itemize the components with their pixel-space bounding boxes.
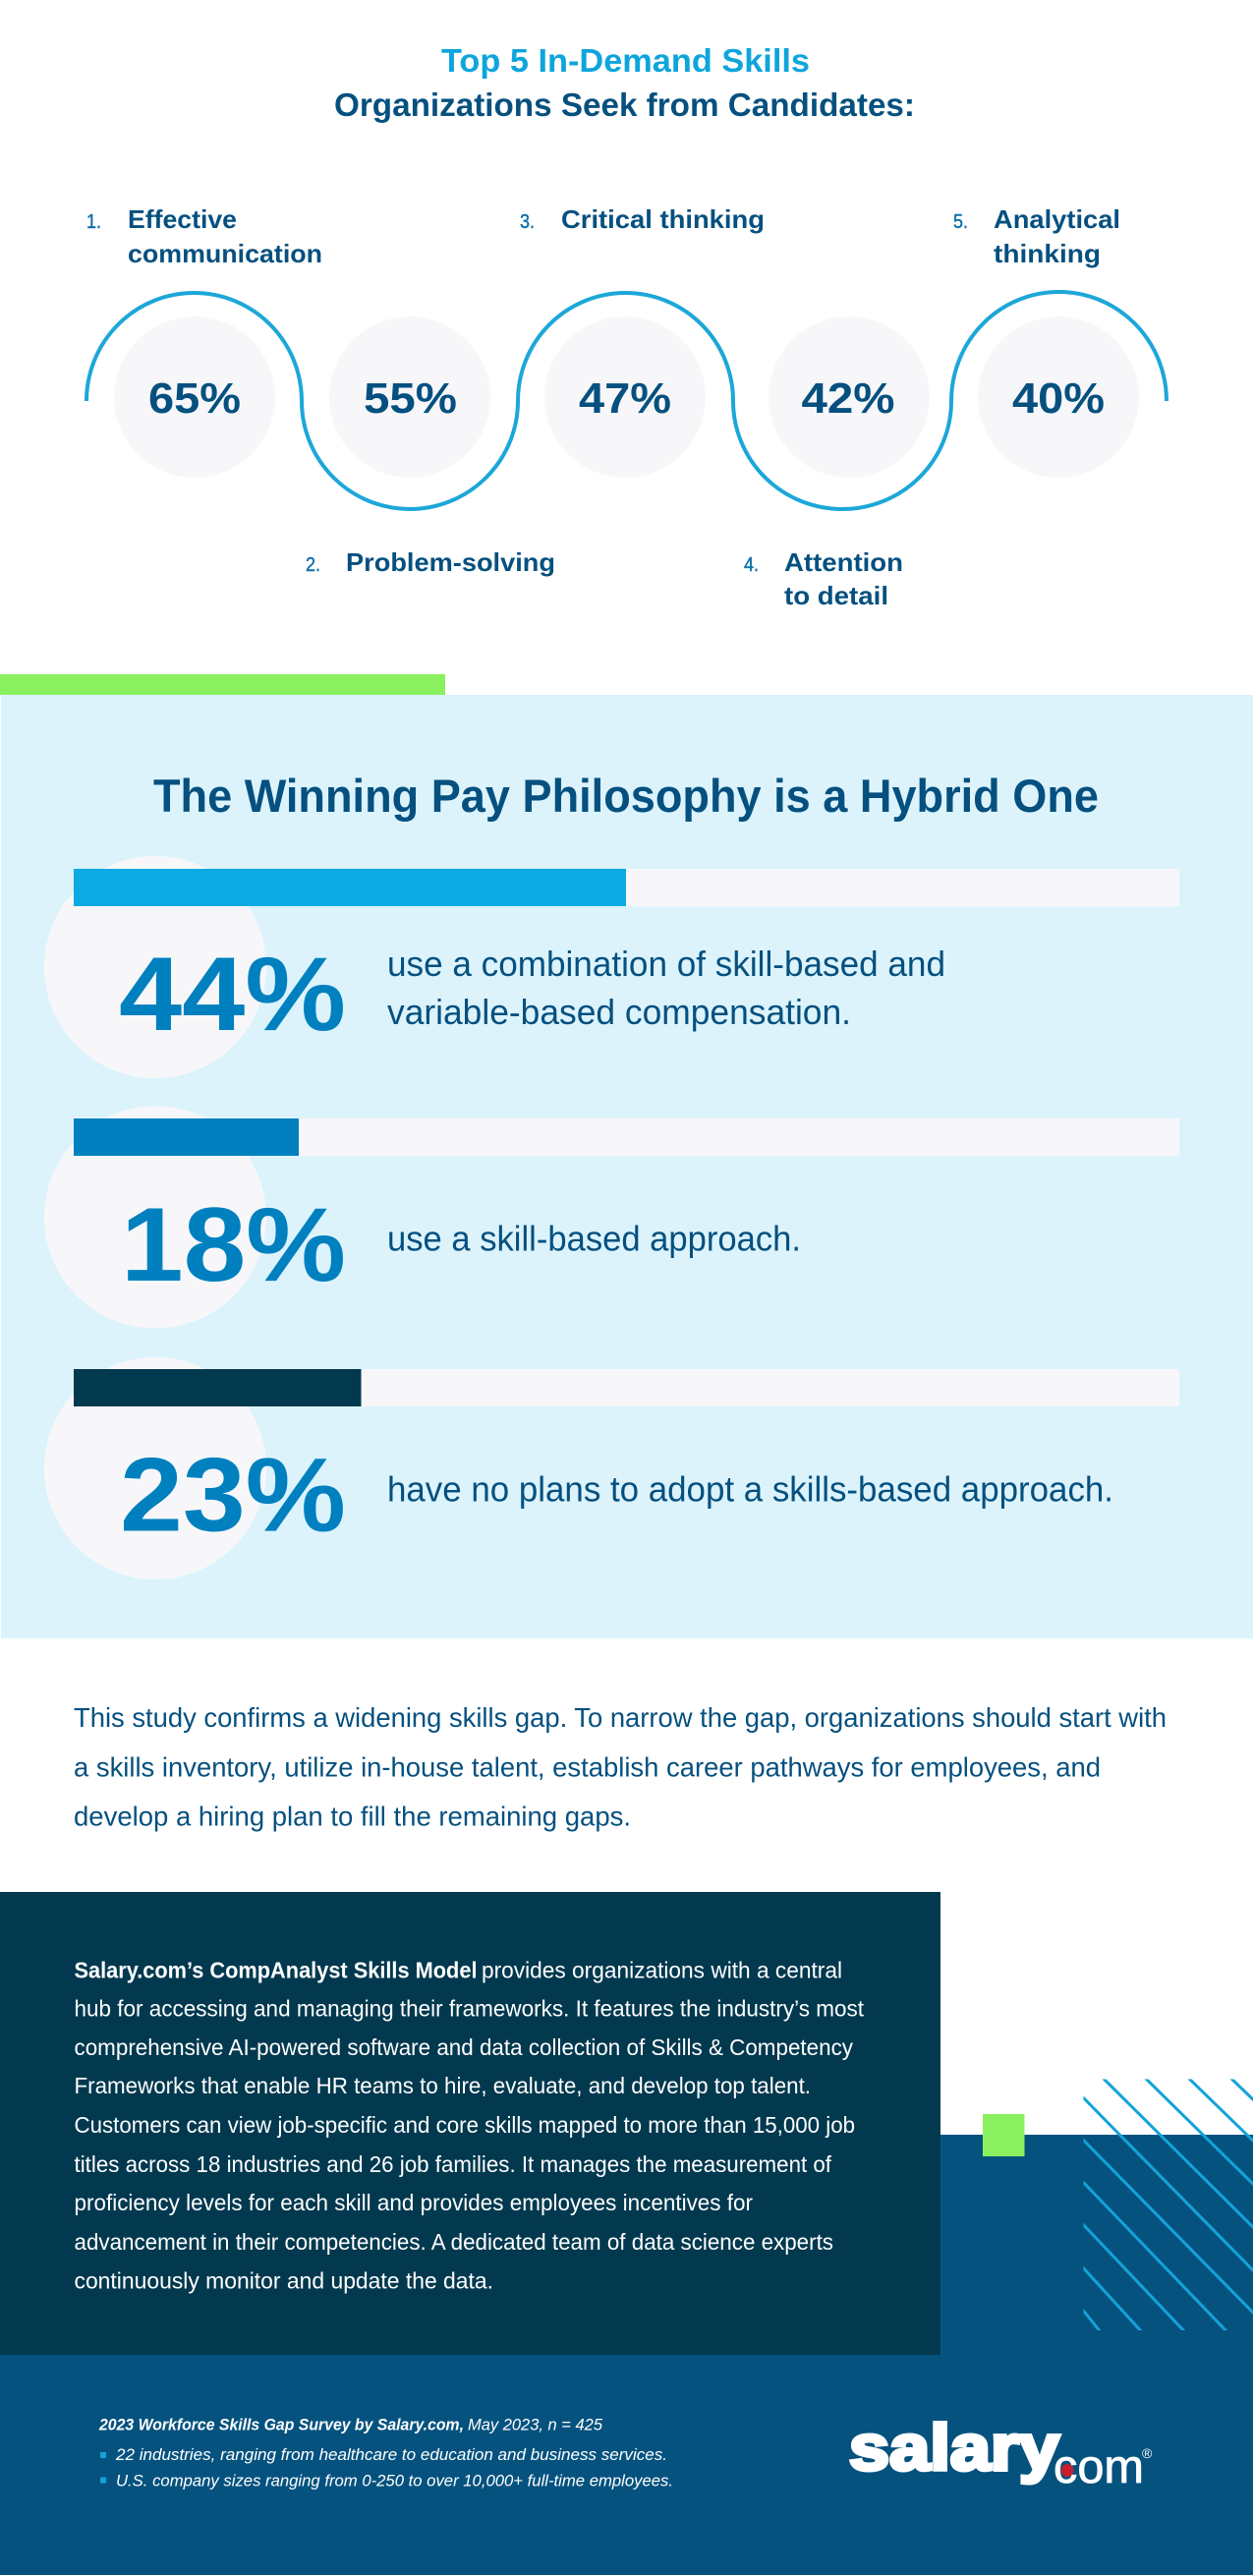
label: attention to detail: to detail xyxy=(784,581,888,610)
text block: survey source xyxy=(98,2416,673,2490)
text block: survey source: 22 industries, ranging from healthcare to education and business services. xyxy=(115,2445,667,2464)
label: critical thinking: 3. xyxy=(520,211,535,233)
row: 18 percent xyxy=(44,1107,1179,1329)
logo: salary.com: com xyxy=(1054,2441,1144,2493)
label: attention to detail: Attention xyxy=(784,547,903,577)
label: effective communication xyxy=(86,204,322,268)
panel: product description: Frameworks that enable HR teams to hire, evaluate, and develop top talent. xyxy=(75,2073,811,2098)
label: analytical thinking xyxy=(953,204,1120,268)
panel: product description xyxy=(0,1892,940,2355)
title xyxy=(334,42,915,123)
row: 23 percent: have no plans to adopt a skills-based approach. xyxy=(387,1468,1113,1510)
label: analytical thinking: Analytical xyxy=(994,204,1120,234)
label: effective communication: communication xyxy=(128,239,322,268)
label: effective communication: 1. xyxy=(86,211,101,233)
panel background xyxy=(1,695,1253,1638)
label: problem-solving: Problem-solving xyxy=(346,547,555,577)
percentage values: 65% xyxy=(148,374,241,423)
wave line xyxy=(86,292,1167,509)
title: Top 5 In-Demand Skills xyxy=(441,42,810,79)
title: Organizations Seek from Candidates: xyxy=(334,86,915,123)
label: problem-solving: 2. xyxy=(306,554,320,576)
label: analytical thinking: thinking xyxy=(994,239,1101,268)
text block: conclusion: develop a hiring plan to fill the remaining gaps. xyxy=(74,1801,631,1832)
text block: survey source: 2023 Workforce Skills Gap Survey by Salary.com, xyxy=(98,2416,464,2433)
text block: survey source: May 2023, n = 425 xyxy=(468,2416,603,2433)
panel: product description: titles across 18 industries and 26 job families. It manages the measurement of xyxy=(75,2151,832,2177)
row: 44 percent: use a combination of skill-based and xyxy=(387,944,945,984)
panel: product description: advancement in their competencies. A dedicated team of data science experts xyxy=(75,2229,833,2255)
percentage values: 47% xyxy=(579,374,671,423)
label: analytical thinking: 5. xyxy=(953,211,968,233)
panel: product description: comprehensive AI-powered software and data collection of Skills & Competency xyxy=(75,2034,853,2060)
row: 23 percent: 23% xyxy=(120,1435,346,1553)
panel: pay philosophy xyxy=(1,695,1253,1638)
percentage values xyxy=(148,374,1105,423)
percentage values: 42% xyxy=(802,374,894,423)
row: 44 percent: variable-based compensation. xyxy=(387,992,851,1032)
heading: The Winning Pay Philosophy is a Hybrid One xyxy=(153,770,1099,822)
percentage values: 55% xyxy=(364,374,457,423)
panel: product description: proficiency levels for each skill and provides employees incentives for xyxy=(75,2190,753,2215)
row: 44 percent: 44% xyxy=(119,935,346,1053)
diagonal stripes xyxy=(1081,2077,1253,2333)
label: effective communication: Effective xyxy=(128,204,237,234)
accent bar xyxy=(0,674,445,695)
panel: top 5 skills xyxy=(86,204,1167,610)
row: 18 percent: 18% xyxy=(121,1185,346,1303)
logo: salary.com xyxy=(849,2411,1153,2493)
row: 23 percent xyxy=(44,1357,1179,1579)
text block: conclusion: This study confirms a widening skills gap. To narrow the gap, organizations should start with xyxy=(74,1702,1167,1733)
logo: salary.com: salary xyxy=(849,2411,1059,2484)
footer background xyxy=(0,2135,1253,2575)
text block: survey source: U.S. company sizes ranging from 0-250 to over 10,000+ full-time employees. xyxy=(116,2471,673,2490)
label: attention to detail xyxy=(744,547,903,610)
logo: salary.com: ® xyxy=(1142,2445,1153,2461)
label: critical thinking: Critical thinking xyxy=(561,204,765,234)
panel: product description: continuously monitor and update the data. xyxy=(75,2268,493,2294)
panel: product description: hub for accessing and managing their frameworks. It features the industry’s most xyxy=(75,1996,865,2022)
percentage circles xyxy=(114,316,1139,478)
text block: conclusion xyxy=(74,1702,1167,1832)
label: attention to detail: 4. xyxy=(744,554,759,576)
percentage values: 40% xyxy=(1012,374,1105,423)
row: 18 percent: use a skill-based approach. xyxy=(387,1219,801,1258)
row: 44 percent xyxy=(44,856,1179,1078)
panel: product description: Salary.com’s CompAnalyst Skills Model xyxy=(75,1958,478,1983)
panel: product description: provides organizations with a central xyxy=(482,1958,842,1983)
text block: conclusion: a skills inventory, utilize in-house talent, establish career pathways for employees, and xyxy=(74,1751,1101,1783)
decorative green square xyxy=(983,2114,1024,2156)
panel: product description: Customers can view job-specific and core skills mapped to more than 15,000 job xyxy=(75,2112,855,2138)
